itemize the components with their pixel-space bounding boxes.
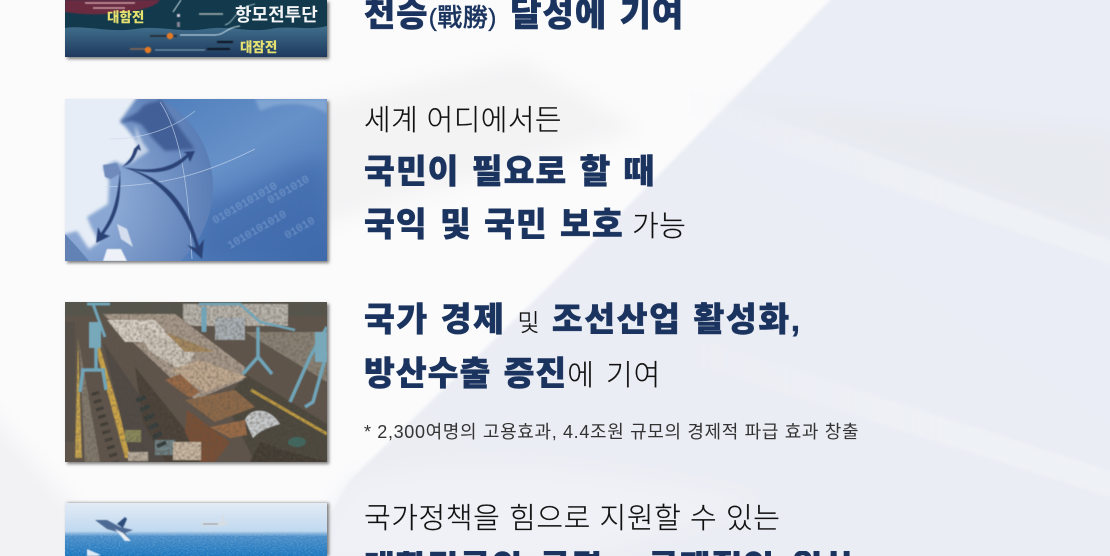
image: shipyard <box>65 302 327 462</box>
image: aircraft over the sea <box>65 503 327 556</box>
image: globe with arrows: 01010101010 <box>211 181 280 227</box>
image: globe with arrows: 1010101010 <box>226 209 289 252</box>
line: national economy: 국가 경제 및 조선산업 활성화, <box>364 302 802 339</box>
image: naval battle diagram: 대잠전 <box>240 40 277 55</box>
image: naval battle diagram <box>65 0 327 57</box>
text block: economy and shipbuilding <box>364 302 859 442</box>
text block: national policy <box>364 503 855 556</box>
text block: global protection <box>364 105 686 244</box>
line: supporting policy: 국가정책을 힘으로 지원할 수 있는 <box>364 503 781 535</box>
image: globe with arrows <box>65 99 327 261</box>
line: when people need: 국민이 필요로 할 때 <box>364 154 655 191</box>
line: protecting national interest: 국익 및 국민 보호 가능 <box>364 207 686 244</box>
line: defence exports: 방산수출 증진에 기여 <box>364 356 661 393</box>
image: globe with arrows: 0101010 <box>266 174 312 207</box>
image: naval battle diagram: 대함전 <box>107 10 144 25</box>
line: anywhere in the world: 세계 어디에서든 <box>364 105 562 137</box>
footnote: employment effect: * 2,300여명의 고용효과, 4.4조원 규모의 경제적 파급 효과 창출 <box>364 422 859 442</box>
image: naval battle diagram: 항모전투단 <box>235 5 318 25</box>
image: globe with arrows: 01010 <box>283 216 318 242</box>
